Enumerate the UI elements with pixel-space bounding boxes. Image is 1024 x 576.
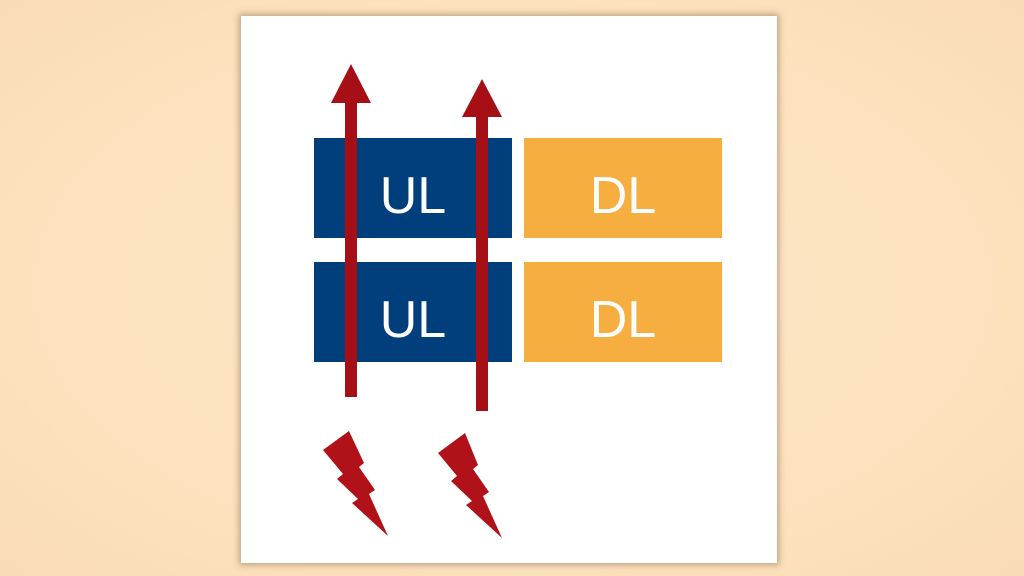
arrow: up 1	[331, 64, 371, 397]
box: DL row 1	[524, 138, 722, 238]
box: DL row 1: DL	[590, 167, 656, 225]
box: DL row 2: DL	[590, 291, 656, 349]
box: UL row 2: UL	[380, 291, 446, 349]
box: UL row 1: UL	[380, 167, 446, 225]
box: UL row 1	[314, 138, 512, 238]
arrow: up 2	[462, 79, 502, 411]
icon: lightning 1	[323, 431, 388, 536]
panel: white card	[241, 16, 777, 563]
box: DL row 2	[524, 262, 722, 362]
box: UL row 2	[314, 262, 512, 362]
icon: lightning 2	[438, 433, 502, 538]
